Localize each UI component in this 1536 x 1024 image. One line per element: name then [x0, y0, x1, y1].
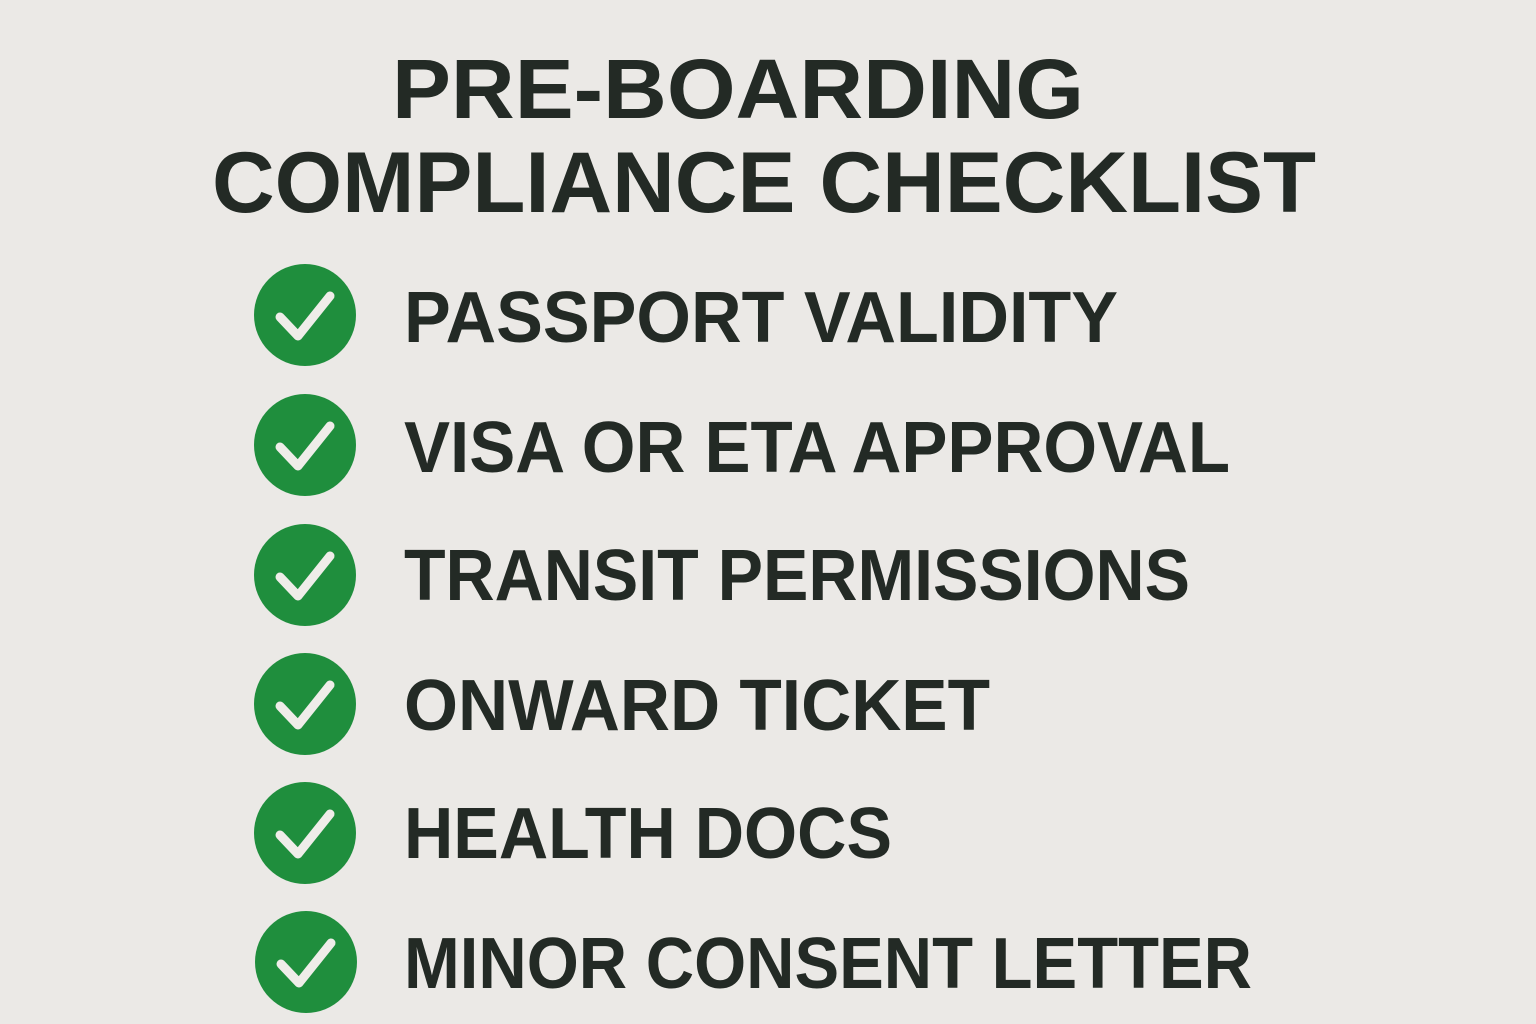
- icon: green check circle: [255, 911, 357, 1013]
- checklist item: health docs: HEALTH DOCS: [404, 794, 892, 874]
- checklist item: transit permissions: [254, 524, 1190, 626]
- icon: green check circle: [254, 394, 356, 496]
- checklist item: minor consent letter: MINOR CONSENT LETTER: [404, 924, 1252, 1004]
- checklist item: onward ticket: [254, 653, 990, 755]
- title: PRE-BOARDING: [392, 42, 1084, 136]
- icon: green check circle: [254, 653, 356, 755]
- icon: green check circle: [254, 264, 356, 366]
- checklist item: health docs: [254, 782, 892, 884]
- icon: green check circle: [254, 524, 356, 626]
- title: COMPLIANCE CHECKLIST: [212, 135, 1316, 231]
- checklist item: visa or eta approval: VISA OR ETA APPROVAL: [404, 408, 1230, 488]
- icon: green check circle: [254, 782, 356, 884]
- checklist item: passport validity: PASSPORT VALIDITY: [404, 278, 1118, 358]
- checklist item: passport validity: [254, 264, 1118, 366]
- checklist item: onward ticket: ONWARD TICKET: [404, 666, 990, 746]
- checklist item: visa or eta approval: [254, 394, 1230, 496]
- checklist item: minor consent letter: [255, 911, 1252, 1013]
- checklist item: transit permissions: TRANSIT PERMISSIONS: [404, 536, 1190, 616]
- title: [212, 42, 1316, 231]
